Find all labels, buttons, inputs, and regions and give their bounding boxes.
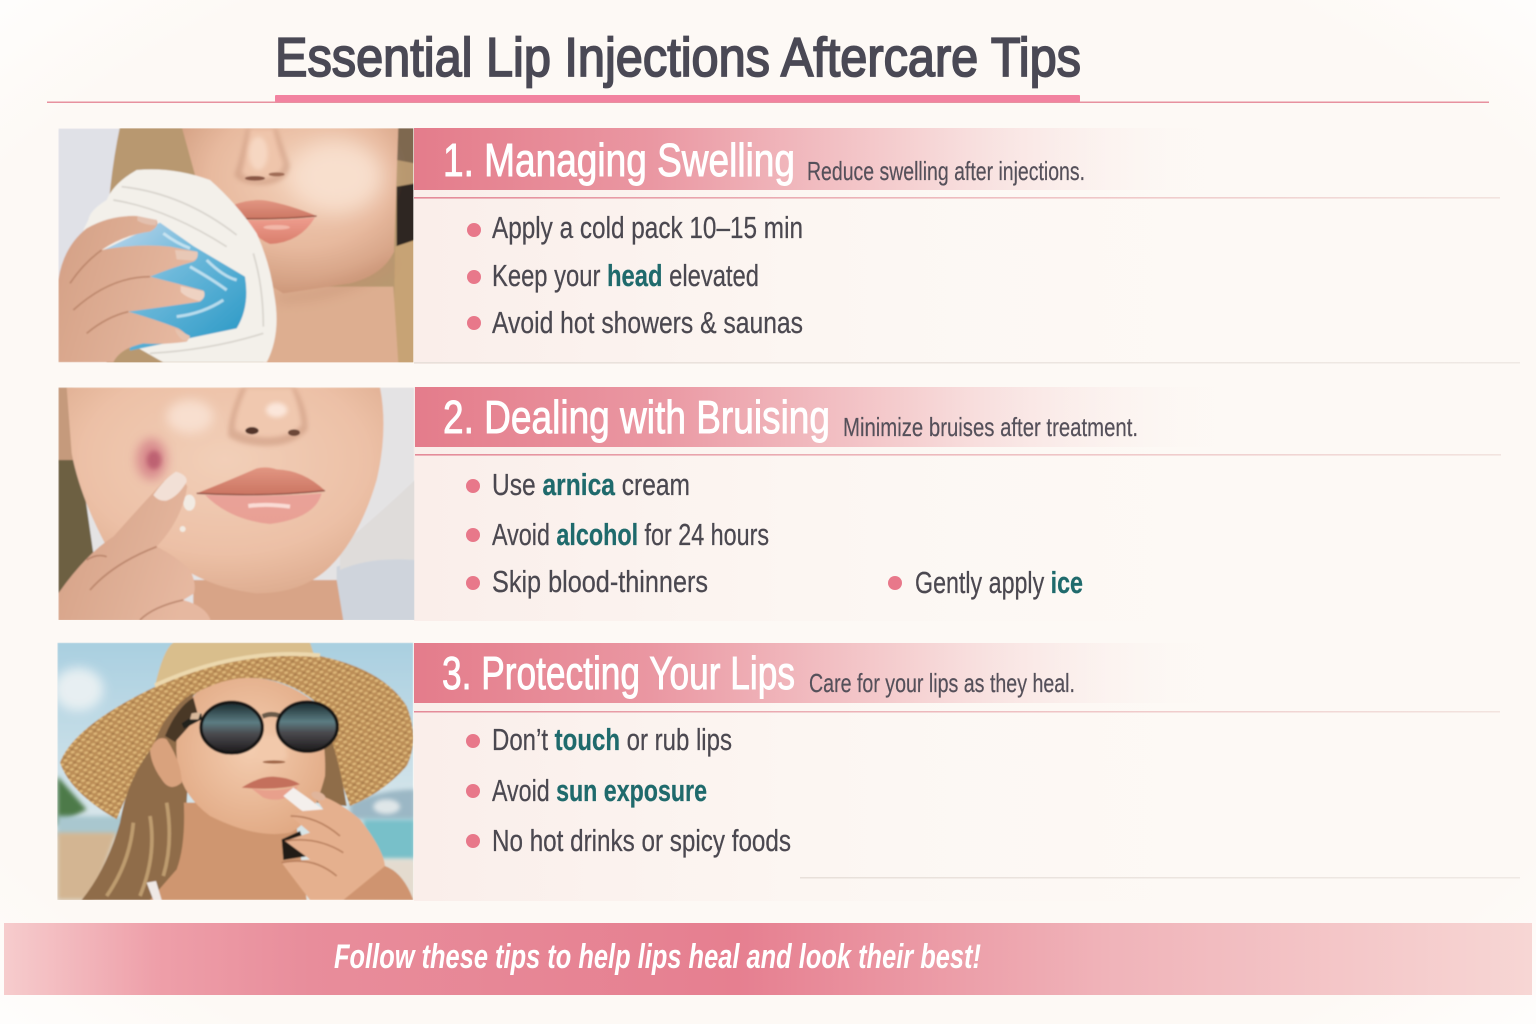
section 1 bullet list (414, 210, 1520, 364)
title (47, 26, 1489, 103)
footer banner: Follow these tips to help lips heal and look their best! (334, 938, 981, 976)
section 2 bullet list: Avoid alcohol for 24 hours (492, 517, 769, 552)
nose (276, 738, 286, 759)
ice pack (100, 223, 246, 351)
face (67, 387, 383, 593)
face (176, 678, 325, 834)
section 3 bullet list: No hot drinks or spicy foods (492, 823, 791, 858)
neck (193, 580, 343, 621)
cream dab (183, 495, 195, 511)
section 1 header banner: Reduce swelling after injections. (807, 156, 1085, 186)
finger and hand (58, 480, 211, 621)
panel: dealing with bruising (58, 387, 1524, 621)
towel (83, 169, 277, 362)
dark hair under chin (282, 831, 308, 860)
section 3 header banner: 3. Protecting Your Lips (442, 647, 795, 699)
panel: protecting your lips (53, 643, 1524, 901)
section 1 bullet list: Avoid hot showers & saunas (492, 305, 803, 340)
section 1 bullet list: Keep your head elevated (492, 258, 759, 293)
panel: managing swelling (58, 127, 1524, 364)
section 1 photo: cold pack on cheek (58, 127, 415, 363)
section 3 header banner: Care for your lips as they heal. (809, 668, 1075, 698)
lips (233, 200, 317, 219)
section 2 header banner: Minimize bruises after treatment. (843, 412, 1138, 442)
lips (242, 777, 300, 789)
sunglasses (182, 713, 202, 729)
section 3 header banner (414, 643, 1500, 712)
face (182, 127, 398, 293)
section 2 photo: cream on bruise (58, 387, 415, 621)
section 2 header banner: 2. Dealing with Bruising (443, 391, 830, 443)
hat (155, 643, 320, 686)
section 3 bullet list: Avoid sun exposure (492, 773, 707, 808)
nose (228, 387, 307, 446)
back hair (82, 693, 193, 900)
section 3 bullet list (466, 722, 1520, 878)
bikini strap (147, 881, 162, 900)
section 2 bullet list: Gently apply ice (915, 565, 1083, 600)
section 3 bullet list: Don’t touch or rub lips (492, 722, 732, 757)
lip balm (283, 787, 322, 812)
neck and shoulder (133, 803, 307, 900)
hand (282, 793, 385, 900)
lips (197, 467, 325, 494)
section 1 header banner (414, 128, 1500, 199)
nose (234, 128, 290, 185)
section 1 header banner: 1. Managing Swelling (443, 134, 795, 186)
hand (58, 216, 204, 362)
section 2 bullet list: Skip blood-thinners (492, 564, 708, 599)
section 2 bullet list (466, 467, 1083, 600)
section 1 bullet list: Apply a cold pack 10–15 min (492, 210, 803, 245)
section 3 photo: sun hat and lip balm (53, 643, 415, 900)
section 2 header banner (415, 387, 1501, 456)
neck (263, 287, 398, 363)
section 2 bullet list: Use arnica cream (492, 467, 690, 502)
title: Essential Lip Injections Aftercare Tips (275, 26, 1081, 88)
footer banner (4, 923, 1532, 995)
